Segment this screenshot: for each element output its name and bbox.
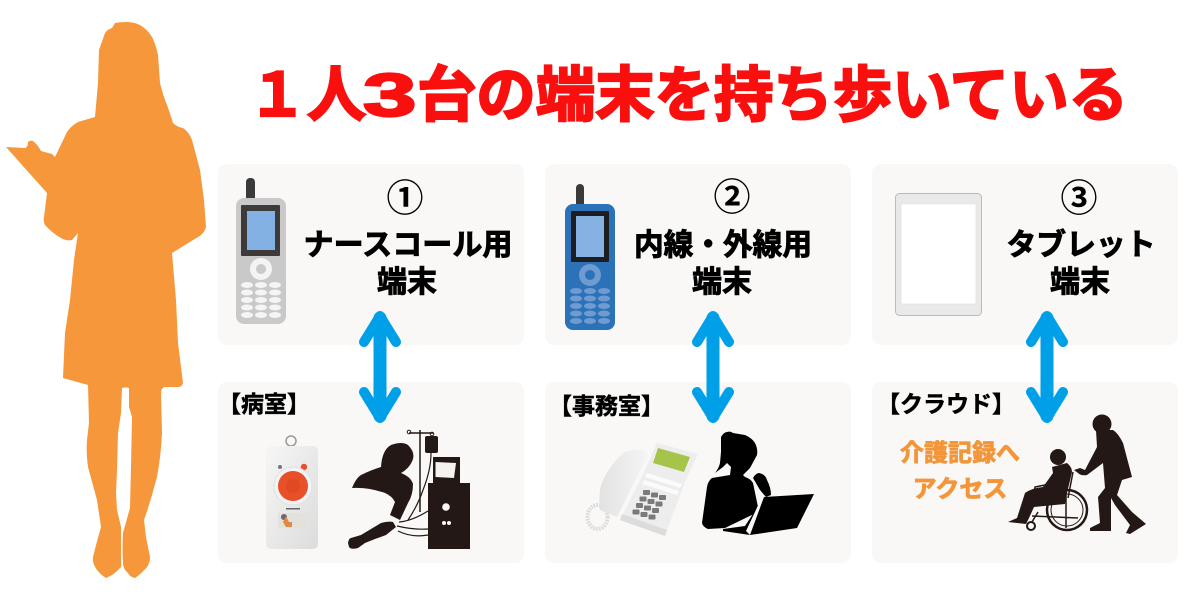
panel: cloud [872,382,1178,563]
number 3: ③ [1060,178,1098,219]
heading: tablet: タブレット [1006,228,1156,262]
heading: terminal: 端末 [692,266,752,299]
panel: internal and external line terminal [545,164,851,345]
title: 台の端末を持ち歩いている [417,62,1128,129]
panel: office [545,382,851,563]
heading: terminal: 端末 [377,266,437,299]
arrow: nurse call to patient room [364,316,396,418]
icon: blue handset [565,184,615,330]
icon: desk telephone [588,443,698,536]
number 2: ② [714,177,750,218]
icon: tablet [896,194,982,316]
heading: terminal: 端末 [1050,266,1110,299]
number 1: ① [386,178,424,219]
icon: patient on dialysis machine [348,430,470,549]
icon: grey handset [236,178,286,324]
label: office: 【事務室】 [549,393,664,419]
icon: call button [266,436,318,549]
arrow: internal line to office [697,316,729,418]
title: １人 [248,62,366,129]
panel: patient room [218,382,524,563]
arrow: tablet to cloud [1031,316,1063,418]
panel: nurse call terminal [218,164,524,345]
heading: internal and external line: 内線・外線用 [634,229,812,262]
label: patient room: 【病室】 [218,391,310,417]
title: 3 [363,62,416,129]
icon: office worker with laptop [702,432,814,535]
woman silhouette [6,22,206,578]
heading: nurse call terminal: ナースコール用 [304,229,512,262]
text: access to care records: 介護記録へ [900,440,1020,467]
panel: tablet terminal [872,164,1178,345]
label: cloud: 【クラウド】 [877,391,1015,417]
text: access: アクセス [913,476,1007,503]
icon: wheelchair and carer [1008,414,1146,534]
